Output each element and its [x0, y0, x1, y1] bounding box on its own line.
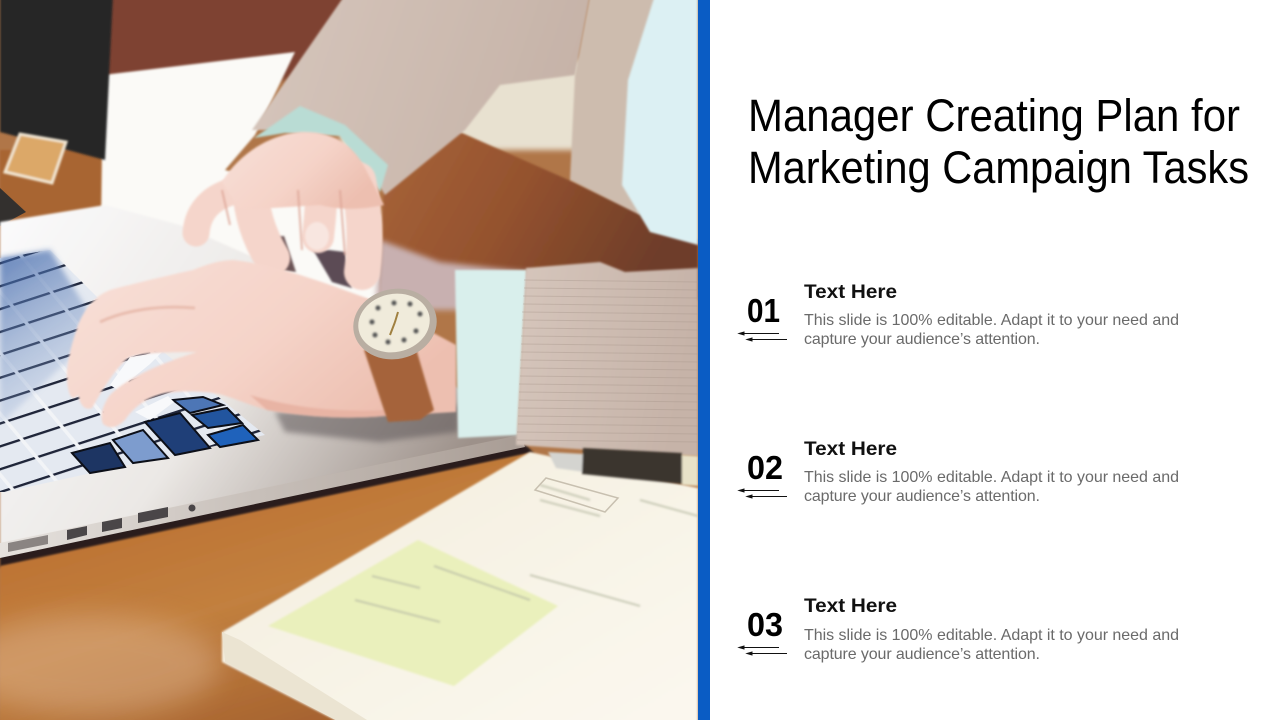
- laptop body: [0, 205, 530, 545]
- title: [748, 90, 1249, 193]
- shirt: [622, 0, 698, 245]
- watch hands: [390, 312, 398, 335]
- body text 01: [804, 312, 1179, 348]
- notebook: [222, 452, 698, 720]
- item 03: [739, 595, 1179, 663]
- finger separators: [222, 190, 345, 255]
- sweater sleeve: [516, 262, 698, 456]
- keyboard: [0, 250, 265, 492]
- item 01: [739, 281, 1179, 348]
- finger crease: [100, 307, 195, 322]
- watch: [353, 288, 437, 423]
- white keys: [110, 352, 174, 420]
- heading 02: Text Here: [804, 438, 897, 460]
- dark blue keys: [72, 397, 258, 473]
- cup tag: [5, 134, 66, 183]
- number 02: 02: [747, 449, 783, 486]
- hand fingers: [196, 170, 365, 272]
- title: Manager Creating Plan for: [748, 90, 1240, 141]
- light reflection on wood: [0, 615, 220, 715]
- back of hand: [222, 132, 384, 210]
- stamp box: [535, 478, 618, 512]
- background wall: [90, 0, 600, 150]
- body text 02: This slide is 100% editable. Adapt it to your need and: [804, 469, 1179, 486]
- number 03: 03: [747, 606, 783, 643]
- body text 03: [804, 627, 1179, 663]
- wooden table right: [380, 132, 698, 300]
- blue divider bar: [698, 0, 710, 720]
- top cuff: [254, 106, 388, 192]
- body text 02: [804, 469, 1179, 505]
- phone corner: [0, 188, 26, 226]
- fingernail: [305, 222, 329, 250]
- arrows 02: [739, 489, 787, 498]
- white paper: [100, 52, 380, 300]
- number 01: 01: [747, 292, 780, 329]
- body text 02: capture your audience’s attention.: [804, 488, 1040, 505]
- laptop front edge: [0, 435, 525, 558]
- top hand: [196, 132, 384, 288]
- watch numerals: [370, 300, 422, 344]
- shadow under hand: [275, 405, 460, 442]
- watch case: [353, 288, 437, 360]
- sticky note: [268, 540, 558, 686]
- item 02: [739, 438, 1179, 505]
- keyboard blue tint: [0, 246, 88, 424]
- pen: [548, 448, 698, 486]
- arrows 01: [739, 332, 787, 341]
- handwriting: [355, 485, 698, 622]
- table left corner: [0, 150, 102, 220]
- thumb side shading: [250, 395, 385, 418]
- sweater body: [252, 0, 590, 195]
- body text 03: This slide is 100% editable. Adapt it to your need and: [804, 627, 1179, 644]
- bottom hand: [67, 260, 456, 427]
- title: Marketing Campaign Tasks: [748, 142, 1249, 193]
- sweater front: [570, 0, 660, 215]
- heading 03: Text Here: [804, 595, 897, 617]
- arrows 03: [739, 646, 787, 655]
- laptop dark underside: [0, 444, 534, 568]
- notebook page edge: [222, 632, 375, 720]
- photo: hands typing on laptop: [0, 0, 698, 720]
- watch face: [358, 294, 430, 352]
- laptop back edge: [375, 240, 530, 310]
- body text 01: This slide is 100% editable. Adapt it to your need and: [804, 312, 1179, 329]
- knit ribs: [517, 280, 698, 442]
- body text 03: capture your audience’s attention.: [804, 646, 1040, 663]
- laptop ports: [8, 504, 196, 552]
- body text 01: capture your audience’s attention.: [804, 331, 1040, 348]
- light cuff: [455, 270, 527, 438]
- wood lower: [0, 452, 534, 720]
- dark cup: [0, 0, 113, 160]
- watch strap: [364, 345, 434, 422]
- heading 01: Text Here: [804, 281, 897, 303]
- finger gap shadows: [280, 234, 353, 290]
